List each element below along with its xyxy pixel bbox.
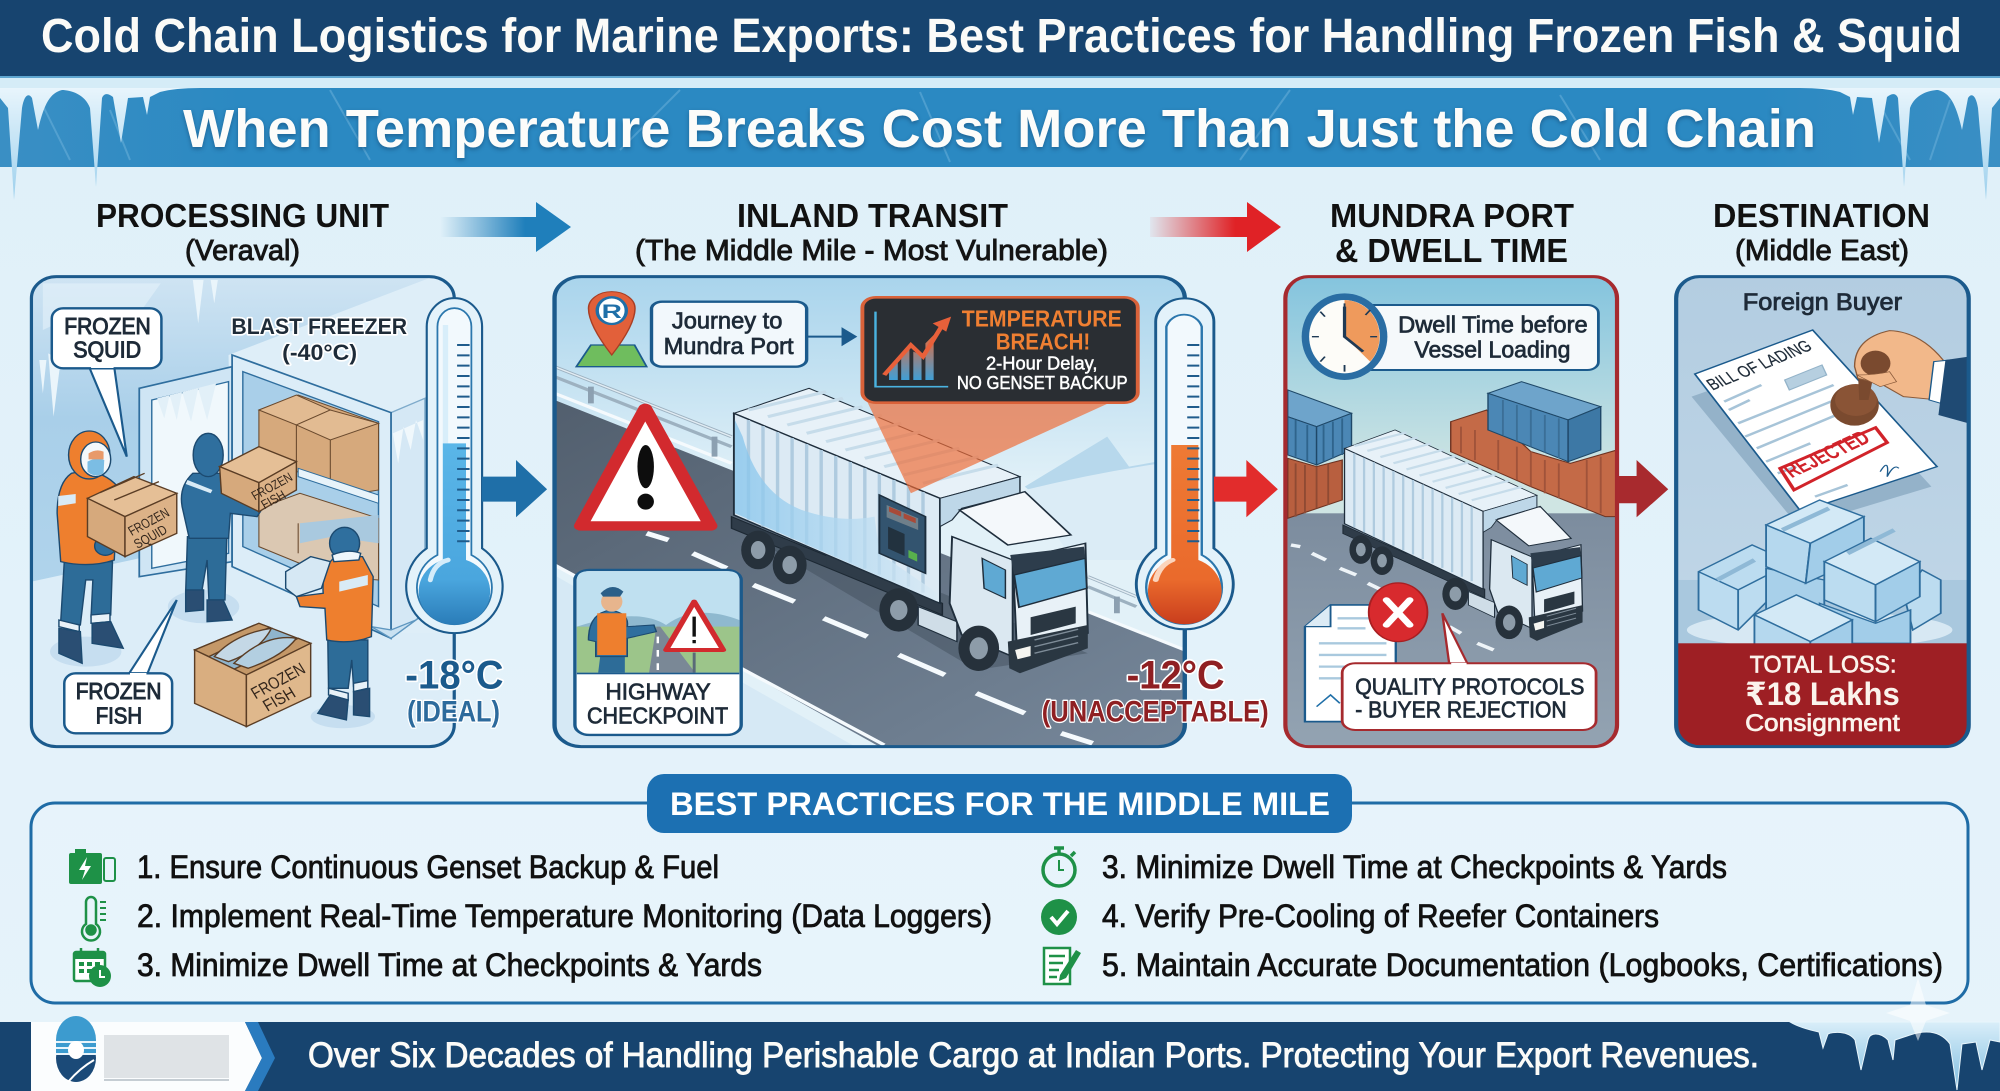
heading: processing unit: (Veraval) — [185, 235, 300, 267]
heading: mundra port: & DWELL TIME — [1335, 232, 1568, 269]
icon: map pin — [576, 292, 647, 367]
door — [139, 367, 232, 577]
label: box 2: FROZEN — [249, 470, 295, 503]
heading: inland transit — [635, 197, 1108, 267]
icon: rejected document — [1305, 583, 1427, 722]
panel border — [555, 277, 1185, 747]
total loss: TOTAL LOSS: — [1750, 652, 1897, 678]
temperature: -18C ideal — [405, 652, 504, 728]
temperature: -12C unacceptable: -12°C — [1127, 652, 1225, 697]
hand and stamp — [1830, 384, 1879, 426]
icon: map pin: R — [602, 301, 622, 323]
breach beam — [867, 402, 1112, 493]
badge: BEST PRACTICES FOR THE MIDDLE MILE — [670, 786, 1330, 822]
arrow: to breach — [807, 329, 855, 344]
sparkle — [1886, 978, 1950, 1041]
ice boxes — [1699, 500, 1941, 647]
callout: dwell time — [1352, 305, 1598, 370]
guardrail — [555, 367, 1136, 607]
callout: temperature breach: BREACH! — [996, 328, 1090, 354]
heading: inland transit: (The Middle Mile - Most Vulnerable) — [635, 235, 1108, 267]
label: bill of lading: BILL OF LADING — [1703, 337, 1816, 394]
road — [555, 400, 1185, 747]
thermometer: breach — [1136, 298, 1233, 629]
icon: warning triangle — [581, 408, 711, 526]
panel: processing unit — [31, 277, 547, 747]
item 4: 4. Verify Pre-Cooling of Reefer Containers — [1102, 898, 1659, 934]
logo block — [31, 1016, 275, 1091]
icon: thermometer — [82, 897, 106, 940]
document — [1692, 391, 1932, 514]
callout: frozen squid: FROZEN — [64, 314, 151, 339]
subtitle band with icicles — [0, 78, 2000, 200]
panel: destination — [1676, 277, 1969, 747]
arrow: transit to port — [1214, 460, 1278, 517]
footer — [0, 1016, 2000, 1091]
label: blast freezer: (-40°C) — [282, 340, 357, 365]
callout: frozen fish — [64, 600, 177, 733]
callout: frozen fish: FISH — [96, 703, 142, 728]
reefer livery — [735, 420, 938, 602]
callout: dwell time: Vessel Loading — [1414, 337, 1570, 363]
callout: journey to mundra port: Mundra Port — [664, 333, 794, 359]
panel border — [31, 277, 454, 747]
card: highway checkpoint: HIGHWAY — [605, 678, 711, 704]
box 1 — [87, 473, 177, 557]
thermometer: ideal — [406, 298, 503, 633]
arrow: transit to port — [1150, 202, 1281, 252]
containers — [1288, 458, 1342, 518]
label: box 1 line 2: SQUID — [131, 521, 170, 551]
label: box 2 line 2: FISH — [258, 487, 288, 512]
worker 3 — [286, 527, 375, 728]
label: fish box: FROZEN — [247, 659, 309, 703]
worker 2 — [168, 433, 262, 623]
title bar — [0, 0, 2000, 78]
reefer unit — [879, 495, 925, 573]
item 3 right: 3. Minimize Dwell Time at Checkpoints & Yards — [1102, 849, 1727, 885]
panel: inland transit — [555, 277, 1278, 747]
temperature: -18C ideal: -18°C — [405, 652, 504, 697]
panel: mundra port — [1285, 277, 1969, 747]
temperature: -12C unacceptable: (UNACCEPTABLE) — [1042, 695, 1269, 728]
callout: frozen squid: SQUID — [73, 337, 141, 362]
panel: best practices — [31, 774, 1968, 1003]
arrow: processing to transit — [440, 202, 571, 252]
heading: mundra port: MUNDRA PORT — [1330, 197, 1574, 234]
callout: temperature breach: TEMPERATURE — [962, 306, 1122, 331]
heading: inland transit: INLAND TRANSIT — [737, 197, 1008, 234]
total loss: Consignment — [1745, 710, 1900, 737]
box 2 — [220, 447, 296, 512]
footer icicles — [1790, 1022, 2000, 1090]
item 3: 3. Minimize Dwell Time at Checkpoints & Yards — [137, 947, 762, 983]
worker 1 — [50, 431, 123, 667]
callout: journey to mundra port — [652, 302, 807, 367]
callout: temperature breach — [862, 297, 1138, 403]
icon: battery — [69, 849, 115, 884]
heading: destination: (Middle East) — [1735, 235, 1909, 267]
temperature: -12C unacceptable — [1042, 652, 1269, 728]
freezer — [391, 398, 425, 638]
icon: calendar — [74, 948, 111, 987]
card: highway checkpoint — [575, 570, 741, 735]
shelf boxes — [259, 395, 379, 580]
temperature: -18C ideal: (IDEAL) — [407, 696, 500, 728]
subtitle band with icicles: When Temperature Breaks Cost More Than Just the Cold Chain — [183, 99, 1816, 159]
fish box — [195, 623, 311, 727]
total loss: ₹18 Lakhs — [1745, 677, 1900, 712]
panel border — [1676, 277, 1969, 747]
heading: processing unit — [96, 197, 389, 267]
arrow: unit to transit — [482, 460, 547, 517]
label: fish box line 2: FISH — [259, 683, 299, 715]
callout: frozen squid — [52, 308, 161, 457]
callout: temperature breach: NO GENSET BACKUP — [957, 372, 1128, 393]
heading: destination — [1713, 197, 1930, 267]
heading: processing unit: PROCESSING UNIT — [96, 197, 389, 234]
panel border — [1285, 277, 1617, 747]
card: highway checkpoint: CHECKPOINT — [587, 702, 728, 728]
icon: clock — [1302, 293, 1387, 380]
total loss — [1745, 652, 1900, 737]
label: blast freezer: BLAST FREEZER — [231, 314, 407, 339]
item 1: 1. Ensure Continuous Genset Backup & Fuel — [137, 849, 719, 885]
icon: stopwatch — [1043, 848, 1075, 886]
icon: document — [1044, 948, 1081, 984]
item 2: 2. Implement Real-Time Temperature Monitoring (Data Loggers) — [137, 898, 992, 934]
callout: quality protocols: QUALITY PROTOCOLS — [1355, 674, 1584, 699]
label: blast freezer — [231, 314, 407, 365]
loss banner — [1676, 643, 1969, 747]
footer: Over Six Decades of Handling Perishable Cargo at Indian Ports. Protecting Your Export Revenues. — [308, 1036, 1759, 1075]
label: foreign buyer: Foreign Buyer — [1743, 289, 1902, 316]
dashes — [647, 533, 1093, 743]
callout: frozen fish: FROZEN — [76, 679, 161, 704]
callout: quality protocols: - BUYER REJECTION — [1355, 697, 1567, 722]
arrow: port to destination — [1617, 460, 1668, 517]
callout: quality protocols — [1342, 613, 1596, 730]
icon: check — [1041, 899, 1077, 935]
callout: journey to mundra port: Journey to — [672, 307, 782, 333]
rejected stamp — [1779, 427, 1887, 490]
rejected stamp: REJECTED — [1779, 427, 1875, 482]
badge — [647, 774, 1352, 833]
item 5: 5. Maintain Accurate Documentation (Logbooks, Certifications) — [1102, 947, 1943, 983]
callout: dwell time: Dwell Time before — [1398, 312, 1588, 338]
label: box 1: FROZEN — [125, 504, 172, 539]
heading: destination: DESTINATION — [1713, 197, 1930, 234]
callout: temperature breach: 2-Hour Delay, — [986, 352, 1098, 373]
heading: mundra port — [1330, 197, 1574, 269]
